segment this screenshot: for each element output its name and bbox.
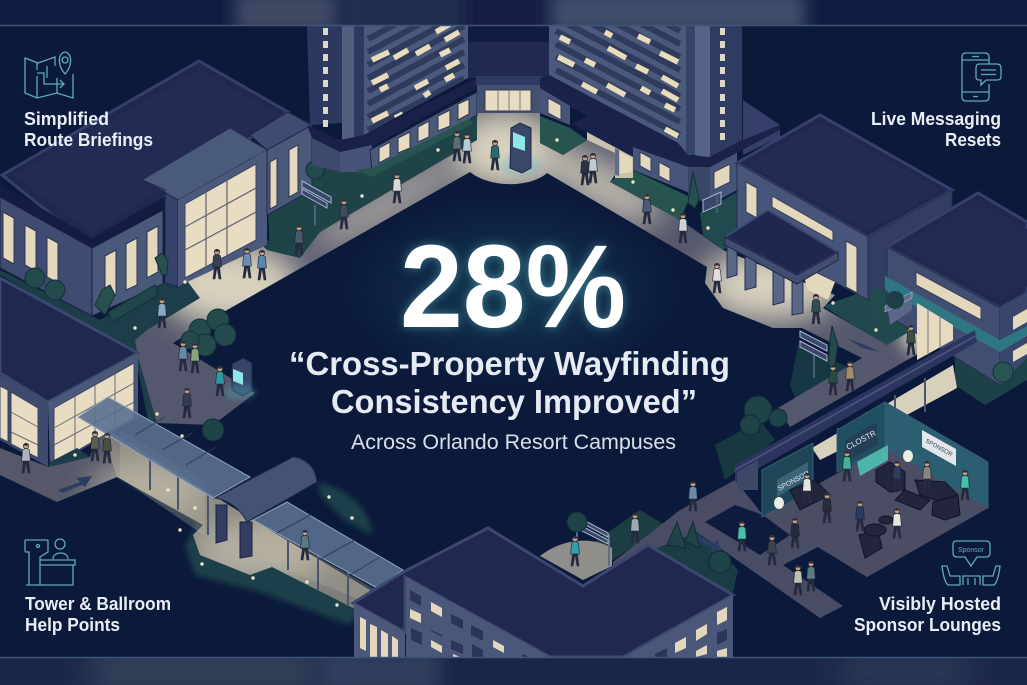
top blurred strip (222, 0, 818, 25)
sign white (922, 430, 956, 466)
label: Live Messaging (871, 109, 1001, 129)
bottom blurred strip (0, 658, 1027, 685)
conifer and lawn sign (688, 172, 699, 208)
facade rows (554, 26, 682, 138)
label: Route Briefings (24, 130, 153, 150)
label (871, 109, 1001, 150)
sign white: SPONSOR (924, 439, 954, 459)
sign middle (845, 422, 878, 462)
label: Simplified (24, 109, 109, 129)
callout: tower and ballroom help points (25, 539, 171, 635)
label: Tower & Ballroom (25, 594, 171, 614)
path lamps (73, 138, 878, 607)
shrubs and trees by hall (25, 161, 324, 356)
quote heading: Consistency Improved” (331, 383, 697, 420)
label (24, 109, 153, 150)
sign left (777, 462, 811, 497)
ground-floor glazing (917, 303, 953, 360)
ribbon windows (916, 272, 981, 320)
lit windows (558, 32, 678, 136)
side wall right (885, 402, 988, 508)
lamps (774, 450, 913, 509)
central teal glow (342, 195, 682, 385)
kiosk near hall (224, 358, 256, 400)
wall with windows (633, 147, 690, 193)
label: Visibly Hosted (879, 594, 1001, 614)
right wing (267, 125, 312, 215)
canopy arch (215, 457, 317, 522)
subheading: Across Orlando Resort Campuses (351, 431, 676, 454)
hedge lawn by plaza (540, 116, 587, 155)
sofas (790, 462, 960, 558)
signposts (302, 181, 827, 566)
teal counter (857, 445, 888, 476)
icon: lounge chairs with sponsor bubble (942, 541, 1000, 585)
podium (307, 78, 477, 152)
lawn glow under glass walkway (120, 470, 372, 625)
lit windows (372, 24, 459, 121)
tower left (307, 26, 478, 177)
callout: live messaging resets (871, 53, 1001, 150)
wall with tall windows (92, 210, 163, 316)
lounge floor (763, 445, 988, 577)
building: bottom centre V-shaped (353, 528, 733, 657)
roof (2, 61, 288, 247)
icon: phone with chat bubble (962, 53, 1001, 101)
back wall middle (837, 402, 885, 472)
sign (885, 292, 912, 312)
side windows (323, 28, 328, 127)
facade rows (364, 26, 468, 135)
sponsor lounge (762, 402, 988, 577)
tall windows (3, 212, 158, 300)
sign middle: CLOSTR (845, 428, 878, 452)
entrance block (142, 128, 267, 200)
covered corridor to lounge (735, 330, 977, 490)
kiosk at tower plaza (500, 123, 540, 175)
porte-cochere columns (727, 245, 803, 315)
front wall (737, 163, 868, 300)
label: Help Points (25, 615, 120, 635)
left wall (0, 197, 92, 316)
glass facade (185, 164, 256, 278)
callout: simplified route briefings (24, 52, 153, 150)
rear block (743, 100, 780, 155)
icon: folded map with pin (25, 52, 73, 98)
pools of warm light on walkways (90, 110, 970, 585)
building: right conference block (725, 115, 952, 315)
hedge (355, 118, 472, 177)
lower walkway to lounge (613, 462, 987, 618)
walkways (0, 112, 988, 618)
teal band (885, 276, 1000, 352)
walkway direction arrows (58, 339, 880, 552)
porte-cochere roof (725, 210, 838, 275)
podium wall by plaza (540, 88, 570, 125)
wall centre (406, 577, 550, 657)
headline statistic: 28% (400, 221, 626, 353)
wall left (354, 603, 405, 657)
icon: help desk with attendant (25, 539, 75, 585)
quote heading: “Cross-Property Wayfinding (289, 345, 730, 382)
wall right (625, 595, 733, 657)
guests walking around the campus (22, 131, 969, 595)
callout: visibly hosted sponsor lounges: Sponsor (958, 547, 985, 554)
back wall left (762, 443, 813, 517)
tower right (540, 26, 780, 208)
label (854, 594, 1001, 635)
ground lawns (0, 115, 1027, 605)
trees near lower walkway (202, 326, 838, 573)
label: Resets (945, 130, 1001, 150)
glass walkway (78, 397, 403, 610)
ribbon window (772, 196, 833, 241)
sign left: SPONSOR (777, 470, 811, 493)
label (25, 594, 171, 635)
trees (868, 290, 880, 318)
label: Sponsor Lounges (854, 615, 1001, 635)
quote heading (289, 345, 730, 420)
building: far right with teal band (868, 193, 1027, 385)
lit doorway under canopy (587, 130, 633, 178)
lower block (688, 167, 710, 205)
building: lower-left with ballroom glass (0, 278, 138, 467)
central entrance between towers (468, 26, 550, 113)
building: top-left conference hall (0, 61, 312, 316)
dark podium roof and canopy (540, 75, 780, 167)
dark void in lower walkway (705, 505, 790, 555)
callout: visibly hosted sponsor lounges (854, 541, 1001, 635)
